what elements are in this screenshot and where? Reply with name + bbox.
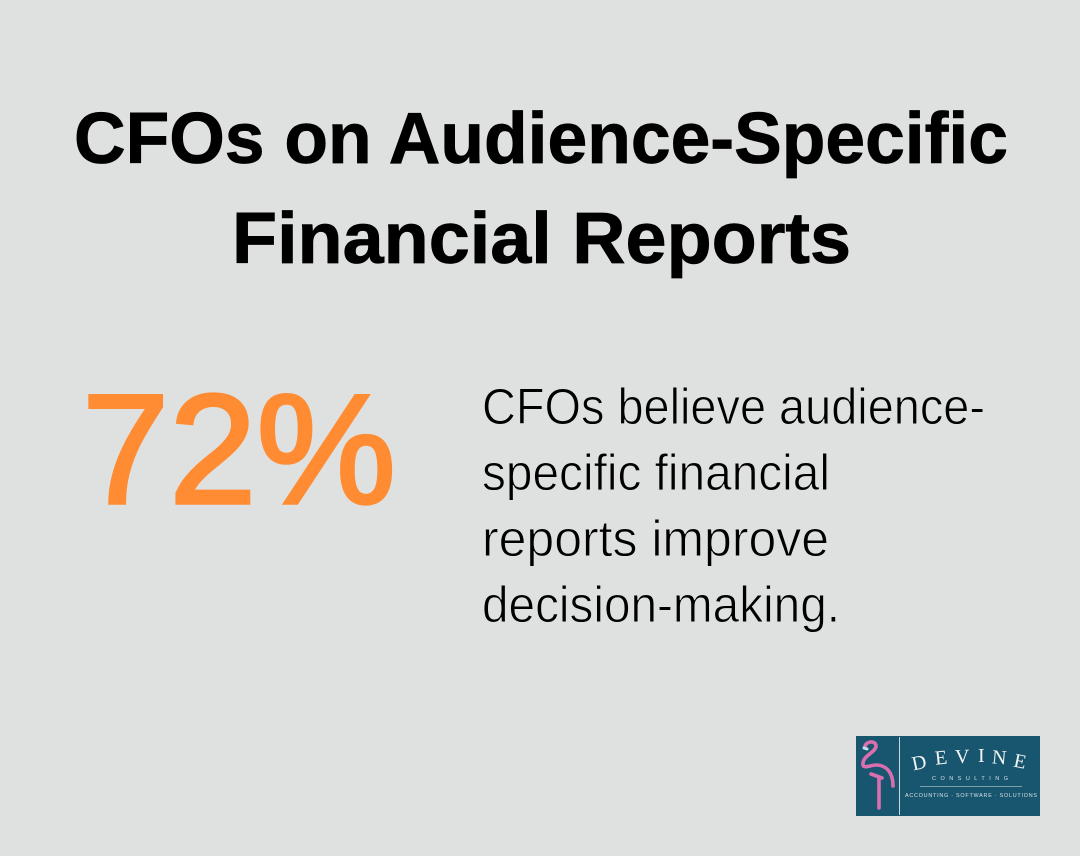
logo wordmark: V — [955, 746, 970, 768]
logo: Devine Consulting — [856, 736, 1040, 816]
title — [74, 99, 1008, 279]
logo wordmark: D — [910, 751, 929, 775]
logo tagline: CONSULTING — [932, 776, 1008, 782]
description text — [482, 378, 985, 633]
description text: specific financial — [482, 444, 830, 501]
title: Financial Reports — [232, 199, 851, 279]
description text: reports improve — [482, 510, 829, 567]
logo tagline — [905, 776, 1037, 799]
title: CFOs on Audience-Specific — [74, 99, 1008, 179]
divider line — [898, 737, 900, 815]
logo wordmark: E — [934, 747, 948, 770]
icon: flamingo — [863, 742, 893, 808]
logo wordmark: I — [978, 745, 985, 767]
logo wordmark: N — [991, 746, 1007, 769]
description text: CFOs believe audience- — [482, 378, 985, 435]
logo tagline: ACCOUNTING · SOFTWARE · SOLUTIONS — [905, 793, 1037, 799]
description text: decision-making. — [482, 576, 840, 633]
logo wordmark: E — [1012, 750, 1028, 774]
logo wordmark — [910, 745, 1028, 775]
statistic: 72%: 72% — [82, 363, 396, 537]
